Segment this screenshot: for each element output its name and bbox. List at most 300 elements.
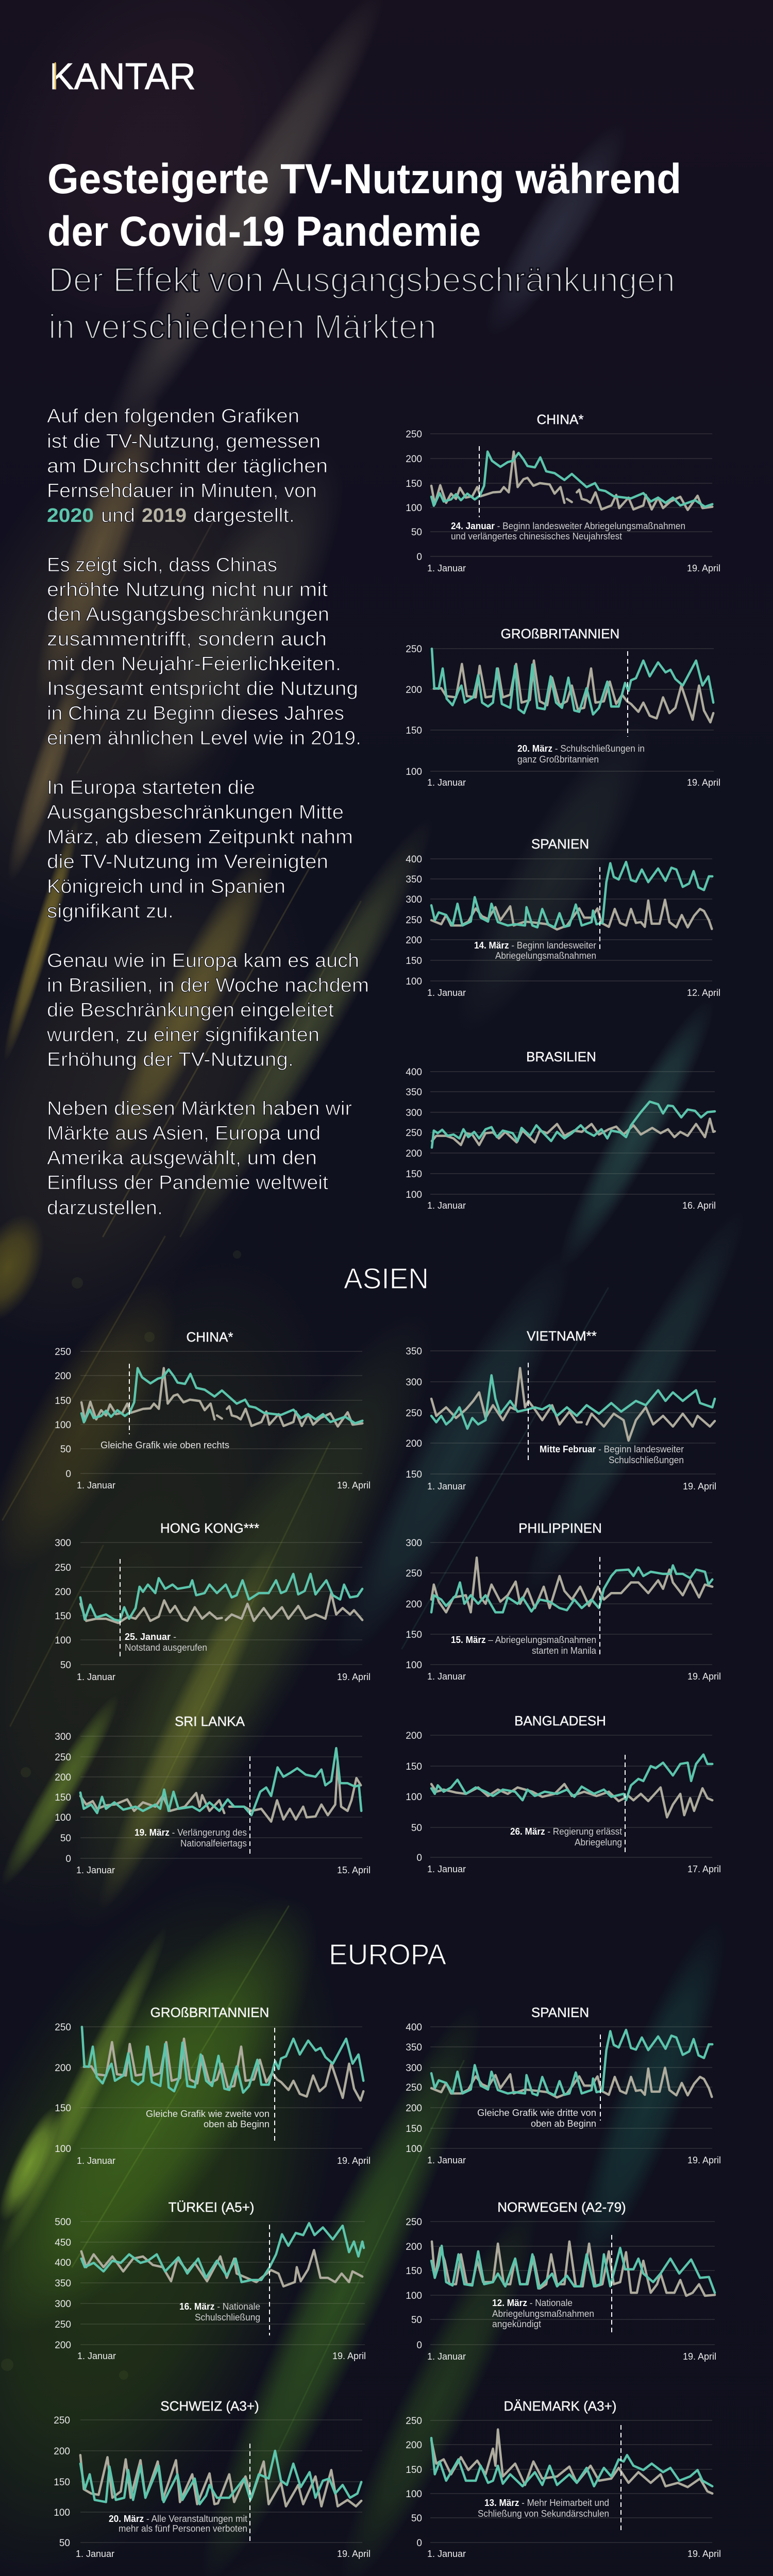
line: 2020 [431,862,712,927]
section heading: Europa: EUROPA [329,1938,446,1971]
chart: Sri Lanka: 250 [55,1752,71,1763]
chart: Spanien (intro): 150 [406,956,422,967]
chart: Philippinen: 200 [406,1599,422,1610]
marker line [627,651,628,737]
line: 2020 [431,2030,712,2095]
x axis labels [427,2155,721,2165]
line: 2019 [81,1368,362,1427]
chart: Türkei: 400 [55,2258,71,2268]
x axis labels: 1. Januar [427,2351,466,2362]
line: 2019 [431,1557,712,1613]
intro text block: März, ab diesem Zeitpunkt nahm [47,826,353,848]
chart: Spanien (intro): 350 [406,874,422,885]
x axis labels: 19. April [332,2351,366,2361]
intro text block: Märkte aus Asien, Europa und [47,1123,321,1144]
chart: Dänemark: 50 [411,2513,422,2524]
line: 2020 [80,1748,361,1815]
x axis labels [427,563,720,573]
annotation: 25. Januar - [125,1632,176,1642]
annotation: oben ab Beginn [531,2119,596,2129]
chart: Norwegen: 150 [406,2266,422,2277]
chart: Spanien (intro): 300 [406,894,422,905]
chart: Brasilien (intro): 350 [406,1087,422,1098]
x axis labels: 19. April [687,1671,721,1682]
annotation: angekündigt [492,2319,541,2329]
line: 2020 [431,1755,712,1800]
line: 2020 [431,452,712,507]
annotation [478,2498,609,2519]
x axis labels: 1. Januar [427,1671,466,1682]
chart: Spanien (Europa): SPANIEN [531,2005,589,2020]
marker line [274,2028,275,2142]
chart: Spanien (Europa): 200 [406,2103,422,2114]
x axis labels: 19. April [337,1480,371,1490]
intro text block: Neben diesen Märkten haben wir [47,1098,352,1120]
chart: Dänemark: 0 [416,2538,422,2549]
chart: Philippinen: 150 [406,1630,422,1640]
annotation: Schulschließungen [609,1455,684,1465]
intro text block: Einfluss der Pandemie weltweit [47,1172,328,1194]
annotation: 24. Januar - Beginn landesweiter Abriegelungsmaßnahmen [451,521,685,531]
x axis labels: 19. April [687,2549,721,2559]
x axis labels: 19. April [683,1481,716,1492]
x axis labels: 1. Januar [427,988,466,998]
line: 2019 [80,1762,361,1822]
x axis labels [76,1865,371,1875]
intro text block: Auf den folgenden Grafiken [47,405,299,427]
x axis labels [427,2351,716,2362]
x axis labels: 1. Januar [427,1864,466,1874]
chart: China (intro): 0 [416,552,422,563]
chart: Brasilien (intro): 300 [406,1108,422,1118]
chart: Bangladesh: BANGLADESH [514,1713,606,1728]
chart: Norwegen: 250 [406,2217,422,2228]
x axis labels [427,1864,721,1874]
annotation: 13. März - Mehr Heimarbeit und [484,2498,609,2508]
chart: Bangladesh: 200 [406,1731,422,1741]
intro text block: Insgesamt entspricht die Nutzung [47,678,358,700]
marker line [620,2425,621,2532]
annotation [125,1632,207,1653]
annotation [540,1444,684,1465]
chart: Norwegen: 100 [406,2291,422,2301]
chart: Türkei: 200 [55,2340,71,2351]
intro text block: und [101,505,135,527]
intro text block: zusammentrifft, sondern auch [47,629,327,650]
x axis labels [427,1481,716,1492]
annotation: ganz Großbritannien [517,754,599,765]
chart: Schweiz: 50 [59,2538,70,2549]
chart: Sri Lanka: 300 [55,1732,71,1742]
line: 2019 [431,900,712,929]
line: 2019 [84,2039,363,2100]
chart: China (intro): 50 [411,527,422,538]
annotation [109,2514,247,2534]
chart: Hong Kong: 100 [55,1635,71,1646]
intro text block: signifikant zu. [47,901,174,922]
chart: Dänemark: 100 [406,2489,422,2500]
line: 2020 [431,2438,712,2486]
line: 2019 [432,1118,715,1145]
chart: Türkei: 350 [55,2278,71,2289]
intro text block: einem ähnlichen Level wie in 2019. [47,727,361,749]
marker line [600,2035,601,2121]
chart: Großbritannien (Europa) [55,2005,371,2166]
chart: Vietnam [406,1328,716,1492]
marker line [611,2235,612,2333]
marker line [528,1363,529,1462]
intro text block: In Europa starteten die [47,777,255,799]
x axis labels: 1. Januar [427,2155,466,2165]
marker line [249,2444,250,2542]
annotation [146,2109,270,2129]
line: 2019 [431,452,712,510]
intro text block: Fernsehdauer in Minuten, von [47,480,317,502]
x axis labels [76,2549,371,2559]
marker line [120,1559,121,1657]
chart: Bangladesh [406,1713,721,1874]
chart: Philippinen: 300 [406,1538,422,1549]
chart: Vietnam: 150 [406,1469,422,1480]
marker line [479,446,480,517]
chart: Dänemark: 150 [406,2465,422,2476]
annotation: Gleiche Grafik wie oben rechts [100,1440,229,1450]
chart: Dänemark [406,2398,721,2559]
intro text block: 2019 [142,505,187,527]
chart: Spanien (Europa): 150 [406,2124,422,2134]
line: 2019 [431,2067,712,2097]
chart: Brasilien (intro): BRASILIEN [526,1049,596,1064]
chart: Großbritannien (intro) [406,626,720,788]
line: 2020 [432,1101,715,1148]
x axis labels: 19. April [687,2155,721,2165]
annotation [517,743,645,765]
title: Gesteigerte TV-Nutzung während [47,156,681,202]
chart: Schweiz: 250 [54,2415,70,2426]
chart: Spanien (Europa) [406,2005,721,2165]
chart: China (Asien): 100 [55,1420,71,1431]
line: 2019 [431,1784,712,1817]
chart: Hong Kong: 200 [55,1587,71,1598]
intro text block [46,405,369,1219]
line: 2020 [81,1368,362,1423]
x axis labels [77,1672,371,1682]
title: der Covid-19 Pandemie [47,208,481,255]
annotation [179,2301,260,2323]
line: 2019 [431,1368,715,1440]
x axis labels [427,2549,721,2559]
chart: Brasilien (intro): 150 [406,1169,422,1180]
annotation [135,1827,247,1849]
chart: Spanien (intro) [406,836,720,998]
chart: Sri Lanka: 50 [60,1833,71,1844]
chart: Bangladesh: 100 [406,1792,422,1803]
x axis labels [427,777,720,788]
intro text block: den Ausgangsbeschränkungen [47,604,329,625]
chart: Vietnam: VIETNAM** [527,1328,597,1344]
x axis labels [427,988,720,998]
chart: China (intro): 250 [406,429,422,440]
chart: Türkei: 250 [55,2319,71,2330]
chart: Großbritannien (Europa): 200 [55,2063,71,2074]
line: 2019 [431,2430,712,2494]
chart: Großbritannien (intro): 250 [406,644,422,655]
chart: China (Asien) [55,1329,371,1490]
intro text block: wurden, zu einer signifikanten [46,1024,320,1046]
intro text block: Ausgangsbeschränkungen Mitte [47,802,344,823]
chart: Türkei: TÜRKEI (A5+) [169,2199,254,2215]
chart: Türkei: 450 [55,2238,71,2248]
chart: Schweiz: SCHWEIZ (A3+) [160,2398,259,2414]
chart: Philippinen: 100 [406,1660,422,1671]
x axis labels: 1. Januar [76,2549,114,2559]
line: 2020 [432,649,713,715]
chart: Großbritannien (Europa): 100 [55,2144,71,2155]
chart: China (Asien): CHINA* [186,1329,233,1345]
intro text block: dargestellt. [193,505,295,527]
chart: Türkei [55,2199,366,2361]
annotation [510,1826,622,1848]
chart: Spanien (intro): 100 [406,976,422,987]
chart: Brasilien (intro): 100 [406,1190,422,1200]
line: 2020 [80,2451,361,2504]
chart: Brasilien (intro): 400 [406,1067,422,1078]
chart: Großbritannien (intro): GROßBRITANNIEN [501,626,619,641]
x axis labels [427,1200,716,1211]
x axis labels: 1. Januar [77,1672,115,1682]
chart: Dänemark: 200 [406,2440,422,2451]
chart: Philippinen [406,1520,721,1682]
annotation: Gleiche Grafik wie zweite von [146,2109,270,2119]
x axis labels: 1. Januar [427,777,466,788]
chart: Vietnam: 200 [406,1438,422,1449]
annotation: 14. März - Beginn landesweiter [474,940,596,951]
chart: Spanien (Europa): 250 [406,2082,422,2093]
x axis labels: 1. Januar [427,563,466,573]
x axis labels: 19. April [337,2549,371,2559]
intro text block: am Durchschnitt der täglichen [47,455,328,477]
chart: China (Asien): 50 [60,1444,71,1455]
chart: Hong Kong: HONG KONG*** [160,1520,259,1536]
chart: Bangladesh: 0 [416,1853,422,1863]
chart: Dänemark: 250 [406,2416,422,2427]
annotation [477,2108,596,2129]
intro text block: ist die TV-Nutzung, gemessen [47,431,321,452]
chart: Vietnam: 250 [406,1408,422,1419]
annotation: Schließung von Sekundärschulen [478,2509,609,2519]
annotation: 19. März - Verlängerung des [135,1827,247,1838]
annotation: Nationalfeiertags [180,1838,247,1849]
chart: Spanien (intro): SPANIEN [531,836,589,852]
annotation: 15. März – Abriegelungsmaßnahmen [451,1635,596,1645]
chart: China (intro) [406,412,720,573]
annotation: 16. März - Nationale [179,2301,260,2312]
x axis labels: 19. April [337,1672,371,1682]
section heading: Asien: ASIEN [344,1262,429,1295]
chart: Hong Kong: 50 [60,1660,71,1671]
chart: Philippinen: PHILIPPINEN [518,1520,602,1536]
chart: Hong Kong: 300 [55,1538,71,1549]
chart: Norwegen: 0 [416,2340,422,2351]
annotation: Gleiche Grafik wie dritte von [477,2108,596,2118]
chart: Türkei: 500 [55,2217,71,2228]
x axis labels [77,2351,366,2361]
x axis labels: 1. Januar [76,1865,115,1875]
intro text block: Erhöhung der TV-Nutzung. [47,1049,294,1071]
chart: Sri Lanka: 100 [55,1812,71,1823]
chart: Norwegen: 50 [411,2315,422,2326]
annotation: starten in Manila [532,1646,597,1656]
logo: KANTAR: KANTAR [49,56,196,97]
annotation [451,521,685,541]
chart: Brasilien (intro) [406,1049,716,1211]
x axis labels [77,2156,371,2166]
chart: Norwegen: NORWEGEN (A2-79) [497,2199,626,2215]
chart: China (Asien): 250 [55,1347,71,1358]
x axis labels [427,1671,721,1682]
chart: China (intro): 100 [406,503,422,514]
chart: Sri Lanka [55,1714,371,1875]
chart: Norwegen: 200 [406,2242,422,2252]
chart: Hong Kong [55,1520,371,1682]
annotation: 20. März - Alle Veranstaltungen mit [109,2514,247,2524]
marker line [599,1557,600,1655]
intro text block: Königreich und in Spanien [47,876,285,897]
annotation [492,2298,594,2329]
x axis labels: 1. Januar [77,2156,115,2166]
title [47,156,681,255]
chart: Spanien (intro): 400 [406,854,422,865]
chart: Großbritannien (intro): 150 [406,725,422,736]
chart: Großbritannien (intro): 200 [406,685,422,696]
annotation [474,940,596,961]
line: 2020 [431,2246,715,2293]
subtitle: Der Effekt von Ausgangsbeschränkungen [48,261,675,299]
chart: Hong Kong: 250 [55,1563,71,1573]
annotation: und verlängertes chinesisches Neujahrsfest [451,531,622,541]
line: 2020 [81,2223,364,2282]
chart: Brasilien (intro): 250 [406,1128,422,1139]
x axis labels: 19. April [683,2351,716,2362]
intro text block: darzustellen. [47,1197,163,1219]
subtitle: in verschiedenen Märkten [48,308,436,346]
chart: Norwegen [406,2199,716,2362]
chart: Bangladesh: 50 [411,1823,422,1834]
line: 2020 [80,1574,362,1621]
line: 2019 [434,660,713,722]
chart: Bangladesh: 150 [406,1761,422,1772]
intro text block: erhöhte Nutzung nicht nur mit [47,579,328,601]
x axis labels: 12. April [687,988,720,998]
chart: Spanien (Europa): 100 [406,2144,422,2155]
x axis labels: 17. April [687,1864,721,1874]
marker line [625,1755,626,1853]
marker line [129,1364,130,1434]
marker line [599,867,600,952]
chart: China (Asien): 0 [65,1469,71,1480]
chart: China (intro): 150 [406,479,422,489]
x axis labels: 19. April [687,777,720,788]
chart: Schweiz [54,2398,371,2559]
line: 2019 [432,2242,715,2296]
line: 2020 [431,1565,712,1613]
intro text block: in Brasilien, in der Woche nachdem [47,975,369,996]
intro text block: in China zu Beginn dieses Jahres [47,703,344,724]
intro text block: mit den Neujahr-Feierlichkeiten. [47,653,341,675]
intro text block: Amerika ausgewählt, um den [47,1147,317,1169]
x axis labels: 19. April [687,563,720,573]
chart: Sri Lanka: SRI LANKA [175,1714,245,1729]
marker line [249,1756,250,1854]
chart: Schweiz: 200 [54,2446,70,2457]
chart: China (Asien): 150 [55,1396,71,1406]
chart: Großbritannien (intro): 100 [406,767,422,777]
chart: Spanien (Europa): 400 [406,2022,422,2033]
line: 2020 [431,1375,715,1429]
x axis labels: 16. April [682,1200,716,1211]
line: 2020 [82,2027,363,2093]
annotation: Abriegelung [575,1837,622,1848]
marker line [269,2225,270,2335]
annotation: Notstand ausgerufen [125,1642,207,1653]
x axis labels: 1. Januar [427,1200,466,1211]
x axis labels: 1. Januar [427,1481,466,1492]
intro text block: Es zeigt sich, dass Chinas [47,554,277,576]
chart: Spanien (intro): 250 [406,915,422,926]
chart: Spanien (Europa): 300 [406,2063,422,2074]
x axis labels: 1. Januar [77,1480,115,1490]
x axis labels: 15. April [337,1865,371,1875]
chart: Schweiz: 100 [54,2507,70,2518]
x axis labels: 1. Januar [77,2351,116,2361]
chart: Vietnam: 350 [406,1346,422,1357]
chart: Vietnam: 300 [406,1377,422,1388]
line: 2019 [81,2250,362,2286]
annotation: Mitte Februar - Beginn landesweiter [540,1444,684,1454]
chart: Spanien (intro): 200 [406,935,422,946]
annotation: Schulschließung [195,2312,260,2323]
annotation: 12. März - Nationale [492,2298,573,2308]
chart: Sri Lanka: 150 [55,1792,71,1803]
x axis labels: 1. Januar [427,2549,466,2559]
annotation: Abriegelungsmaßnahmen [492,2309,594,2319]
chart: China (Asien): 200 [55,1371,71,1382]
annotation: Abriegelungsmaßnahmen [495,951,596,961]
annotation: 26. März - Regierung erlässt [510,1826,622,1837]
chart: Türkei: 300 [55,2299,71,2310]
x axis labels [77,1480,371,1490]
chart: Sri Lanka: 200 [55,1772,71,1783]
chart: Sri Lanka: 0 [65,1854,71,1865]
intro text block: Genau wie in Europa kam es auch [47,950,359,972]
intro text block: die TV-Nutzung im Vereinigten [47,851,328,873]
chart: Schweiz: 150 [54,2477,70,2488]
chart: Dänemark: DÄNEMARK (A3+) [504,2398,616,2414]
annotation: oben ab Beginn [204,2119,270,2129]
intro text block: die Beschränkungen eingeleitet [47,999,334,1021]
chart: Großbritannien (Europa): 150 [55,2103,71,2114]
chart: China (intro): CHINA* [536,412,584,427]
annotation [451,1635,597,1656]
chart: Großbritannien (Europa): 250 [55,2022,71,2033]
chart: Philippinen: 250 [406,1568,422,1579]
line: 2019 [80,2455,361,2506]
subtitle [48,261,675,346]
intro text block: 2020 [47,505,94,527]
x axis labels: 19. April [337,2156,371,2166]
annotation: 20. März - Schulschließungen in [517,743,645,754]
chart: China (intro): 200 [406,454,422,465]
